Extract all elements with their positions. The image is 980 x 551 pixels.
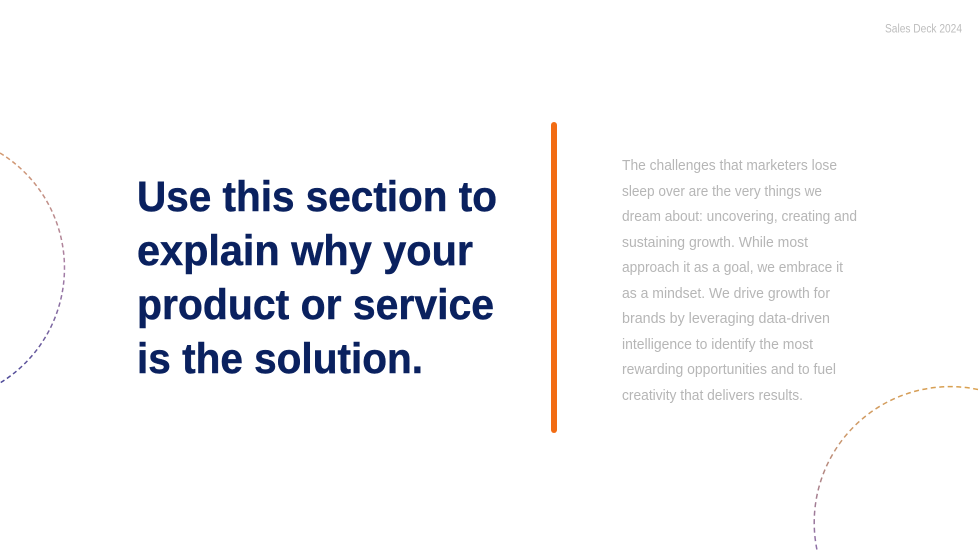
body paragraph: intelligence to identify the most bbox=[622, 336, 814, 353]
heading bbox=[137, 174, 497, 383]
body paragraph bbox=[622, 157, 857, 404]
orange vertical divider bbox=[551, 122, 557, 433]
body paragraph: brands by leveraging data-driven bbox=[622, 310, 830, 327]
body paragraph: sleep over are the very things we bbox=[622, 183, 822, 200]
heading: is the solution. bbox=[137, 336, 423, 383]
body paragraph: dream about: uncovering, creating and bbox=[622, 208, 857, 225]
body paragraph: rewarding opportunities and to fuel bbox=[622, 361, 836, 378]
decorative dashed arc: left bbox=[0, 153, 64, 383]
heading: explain why your bbox=[137, 228, 473, 275]
body paragraph: sustaining growth. While most bbox=[622, 234, 809, 251]
page label: Sales Deck 2024: Sales Deck 2024 bbox=[885, 24, 963, 36]
decorative dashed arc: bottom right bbox=[814, 387, 978, 550]
heading: product or service bbox=[137, 282, 494, 329]
body paragraph: The challenges that marketers lose bbox=[622, 157, 837, 174]
body paragraph: approach it as a goal, we embrace it bbox=[622, 259, 844, 276]
body paragraph: as a mindset. We drive growth for bbox=[622, 285, 830, 302]
heading: Use this section to bbox=[137, 174, 497, 221]
body paragraph: creativity that delivers results. bbox=[622, 387, 803, 404]
